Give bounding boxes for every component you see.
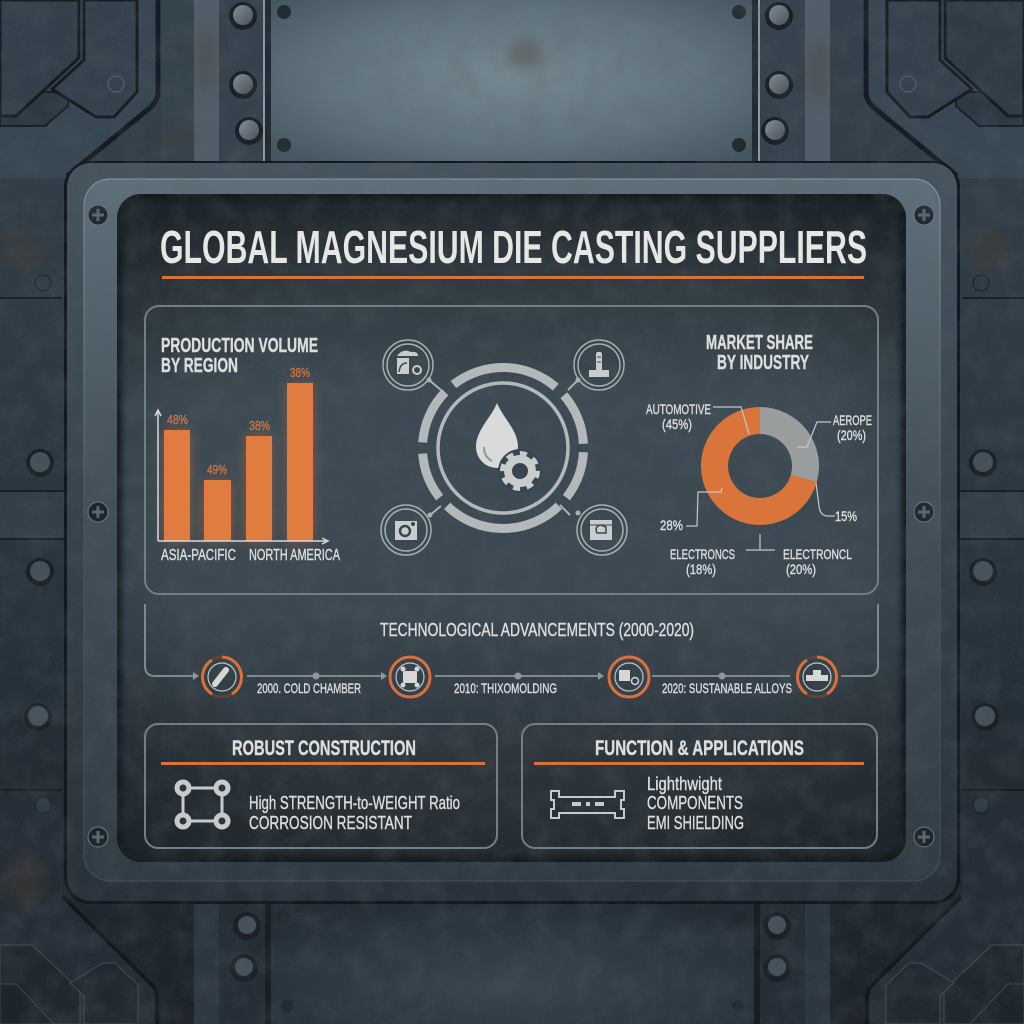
- bar chart: production volume by region: [155, 335, 340, 564]
- milestone 2010: [390, 657, 430, 697]
- milestone 2020: [609, 657, 649, 697]
- central diagram: droplet and gear: [381, 340, 627, 555]
- axis labels: NORTH AMERICA: [249, 547, 340, 564]
- panel text: COMPONENTS: [647, 793, 743, 813]
- panel: charts: [145, 306, 878, 594]
- connector arrows and dots: [193, 672, 726, 680]
- donut labels: (20%): [786, 561, 816, 577]
- donut labels: (18%): [686, 561, 716, 577]
- panel text: [249, 793, 460, 833]
- axis labels: [161, 547, 340, 564]
- axis labels: ASIA-PACIFIC: [161, 547, 236, 564]
- icon: linked frame: [177, 782, 228, 827]
- droplet: [476, 403, 518, 468]
- milestone end: [797, 657, 837, 697]
- side seams: [0, 297, 1024, 791]
- bottom right strap: [754, 895, 830, 1024]
- milestone 2000: [202, 657, 242, 697]
- donut orange segment: [701, 407, 817, 525]
- chart heading: PRODUCTION VOLUME: [161, 335, 318, 357]
- donut labels: [646, 401, 872, 577]
- bottom centre plate: [271, 895, 755, 1024]
- segmented ring: [423, 367, 583, 528]
- panel heading: ROBUST CONSTRUCTION: [232, 737, 416, 760]
- donut chart: market share by industry: [646, 332, 872, 577]
- heading rule: [161, 762, 485, 765]
- bar values: 38%: [249, 418, 270, 433]
- donut labels: 28%: [660, 517, 683, 533]
- icon: injection press: [574, 340, 624, 390]
- panel text: [647, 774, 744, 833]
- bar values: 49%: [207, 462, 227, 477]
- milestone labels: 2020: SUSTANABLE ALLOYS: [662, 680, 792, 696]
- bar values: [167, 365, 310, 477]
- bar values: 48%: [167, 412, 188, 427]
- donut labels: (45%): [662, 416, 692, 432]
- top right strap: [752, 0, 830, 165]
- panel: robust construction: [145, 724, 497, 848]
- timeline: technological advancements: [145, 604, 878, 697]
- panel text: High STRENGTH-to-WEIGHT Ratio: [249, 793, 460, 813]
- panel heading: FUNCTION & APPLICATIONS: [595, 737, 804, 760]
- donut grey segment: [760, 407, 819, 482]
- milestone labels: [257, 680, 792, 696]
- donut labels: ELECTRONCL: [783, 546, 852, 562]
- donut labels: AEROPE: [833, 412, 872, 428]
- panel text: Lighthwight: [647, 774, 722, 794]
- chart heading: BY INDUSTRY: [717, 352, 809, 374]
- milestone labels: 2000. COLD CHAMBER: [257, 680, 361, 696]
- top centre plate: [271, 0, 755, 170]
- donut labels: ELECTRONCS: [670, 546, 735, 562]
- top left strap: [161, 0, 271, 165]
- donut labels: (20%): [837, 427, 866, 443]
- metal frame: [64, 161, 960, 904]
- bar glow: [164, 383, 313, 541]
- icon: die mold: [381, 505, 431, 555]
- timeline connectors: [145, 604, 878, 676]
- milestone labels: 2010: THIXOMOLDING: [454, 680, 557, 696]
- frame screws: [88, 205, 934, 847]
- chart heading: [161, 335, 318, 377]
- screen: [117, 194, 906, 862]
- timeline heading: TECHNOLOGICAL ADVANCEMENTS (2000-2020): [380, 620, 694, 640]
- panel text: CORROSION RESISTANT: [249, 813, 412, 833]
- chart heading: [706, 332, 813, 374]
- icon: quality chart: [577, 505, 627, 555]
- bar values: 38%: [290, 365, 310, 380]
- chart heading: BY REGION: [161, 355, 238, 377]
- corner plate bottom left: [0, 791, 157, 1024]
- icon: component bracket: [551, 791, 624, 818]
- panel: function and applications: [522, 724, 877, 848]
- axes: [155, 410, 328, 544]
- chart heading: MARKET SHARE: [706, 332, 813, 354]
- connector arrows: [426, 378, 580, 518]
- inner ring: [438, 383, 568, 513]
- corner plate bottom right: [867, 791, 1024, 1024]
- donut labels: AUTOMOTIVE: [646, 401, 711, 417]
- icon: casting machine: [383, 340, 433, 390]
- donut labels: 15%: [835, 508, 857, 524]
- bars: [164, 383, 313, 541]
- gear: [498, 449, 542, 493]
- leader lines: [686, 407, 835, 550]
- panel text: EMI SHIELDING: [647, 813, 744, 833]
- heading rule: [534, 762, 864, 765]
- corner plate top right: [863, 0, 1024, 178]
- corner plate top left: [0, 0, 161, 178]
- bottom left strap: [194, 895, 271, 1024]
